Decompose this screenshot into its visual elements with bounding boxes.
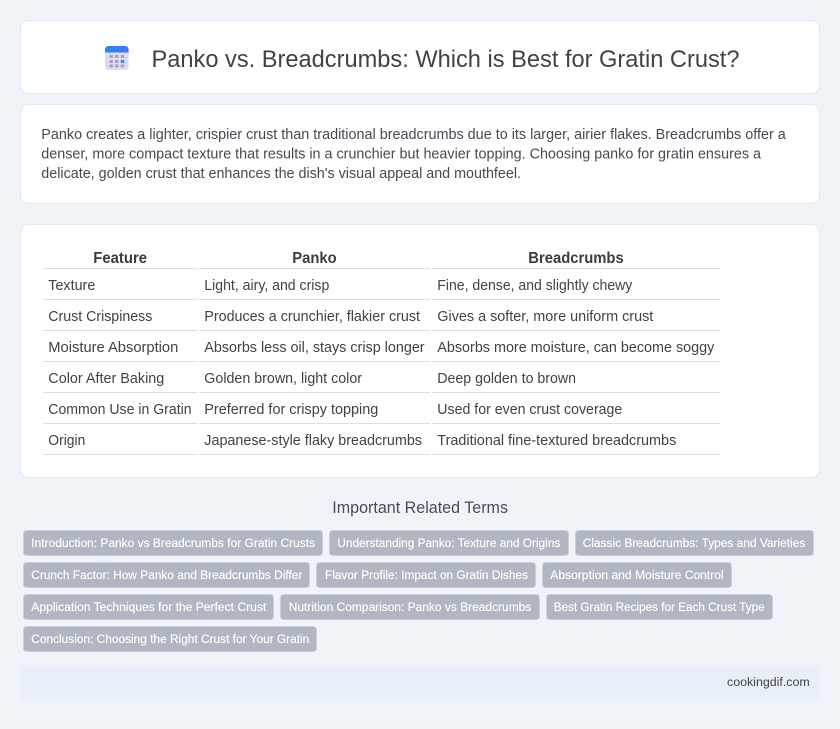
row: origin: Origin <box>48 433 85 449</box>
tag: Conclusion: Choosing the Right Crust for Your Gratin <box>31 632 309 646</box>
tag <box>24 626 316 652</box>
text block: description: denser, more compact texture that results in a crunchier but heavier topping. Choosing panko for gratin ensures a <box>41 146 761 162</box>
row: crust crispiness: Produces a crunchier, flakier crust <box>204 309 420 325</box>
footer <box>20 665 820 699</box>
table header: Breadcrumbs <box>528 250 624 267</box>
text block: description: Panko creates a lighter, crispier crust than traditional breadcrumbs due to its larger, airier flakes. Breadcrumbs offer a <box>41 127 786 143</box>
tag <box>280 594 540 620</box>
table header: Feature <box>93 250 147 267</box>
table header: Panko <box>292 250 337 267</box>
tag <box>316 562 536 588</box>
panel: description <box>20 104 820 204</box>
icon: calendar <box>105 46 129 70</box>
row: texture <box>48 278 633 294</box>
row: origin: Japanese-style flaky breadcrumbs <box>204 433 422 449</box>
row: crust crispiness: Gives a softer, more uniform crust <box>437 309 653 325</box>
row: moisture absorption <box>48 340 715 356</box>
tag: Flavor Profile: Impact on Gratin Dishes <box>325 568 528 582</box>
tag <box>542 562 732 588</box>
row: common use in gratin: Common Use in Gratin <box>48 402 192 418</box>
row: color after baking: Golden brown, light color <box>204 371 362 387</box>
panel: title card <box>20 20 820 94</box>
row: common use in gratin: Used for even crust coverage <box>437 402 622 418</box>
tag: Classic Breadcrumbs: Types and Varieties <box>583 536 805 550</box>
tag: Application Techniques for the Perfect Crust <box>31 600 267 614</box>
tag: Best Gratin Recipes for Each Crust Type <box>554 600 765 614</box>
row: common use in gratin <box>48 402 622 418</box>
row: crust crispiness: Crust Crispiness <box>48 309 152 325</box>
heading: important related terms: Important Related Terms <box>332 499 508 517</box>
panel: comparison table <box>20 224 820 478</box>
row: texture: Texture <box>48 278 95 294</box>
text block: description: delicate, golden crust that enhances the dish's visual appeal and mouthfeel. <box>41 166 521 182</box>
tag: Introduction: Panko vs Breadcrumbs for Gratin Crusts <box>31 536 315 550</box>
row: moisture absorption: Absorbs more moisture, can become soggy <box>437 340 715 356</box>
row: color after baking: Deep golden to brown <box>437 371 576 387</box>
row: origin: Traditional fine-textured breadcrumbs <box>437 433 676 449</box>
text block: description <box>41 127 786 182</box>
tag <box>24 530 322 556</box>
panel: related term tags <box>24 530 814 652</box>
tag <box>330 530 568 556</box>
footer source text: cookingdif.com <box>727 675 810 689</box>
tag: Nutrition Comparison: Panko vs Breadcrumbs <box>289 600 531 614</box>
tag: Crunch Factor: How Panko and Breadcrumbs Differ <box>31 568 302 582</box>
row: moisture absorption: Absorbs less oil, stays crisp longer <box>204 340 425 356</box>
tag <box>576 530 814 556</box>
tag <box>24 594 274 620</box>
row: common use in gratin: Preferred for crispy topping <box>204 402 378 418</box>
title: Panko vs. Breadcrumbs: Which is Best for Gratin Crust? <box>152 46 740 73</box>
row: moisture absorption: Moisture Absorption <box>48 340 178 356</box>
row: crust crispiness <box>48 309 653 325</box>
row: texture: Light, airy, and crisp <box>204 278 329 294</box>
tag <box>24 562 310 588</box>
row: origin <box>48 433 676 449</box>
row: texture: Fine, dense, and slightly chewy <box>437 278 633 294</box>
table header <box>93 250 624 267</box>
row: color after baking <box>48 371 576 387</box>
tag <box>546 594 772 620</box>
tag: Understanding Panko: Texture and Origins <box>337 536 560 550</box>
tag: Absorption and Moisture Control <box>550 568 724 582</box>
row: color after baking: Color After Baking <box>48 371 164 387</box>
